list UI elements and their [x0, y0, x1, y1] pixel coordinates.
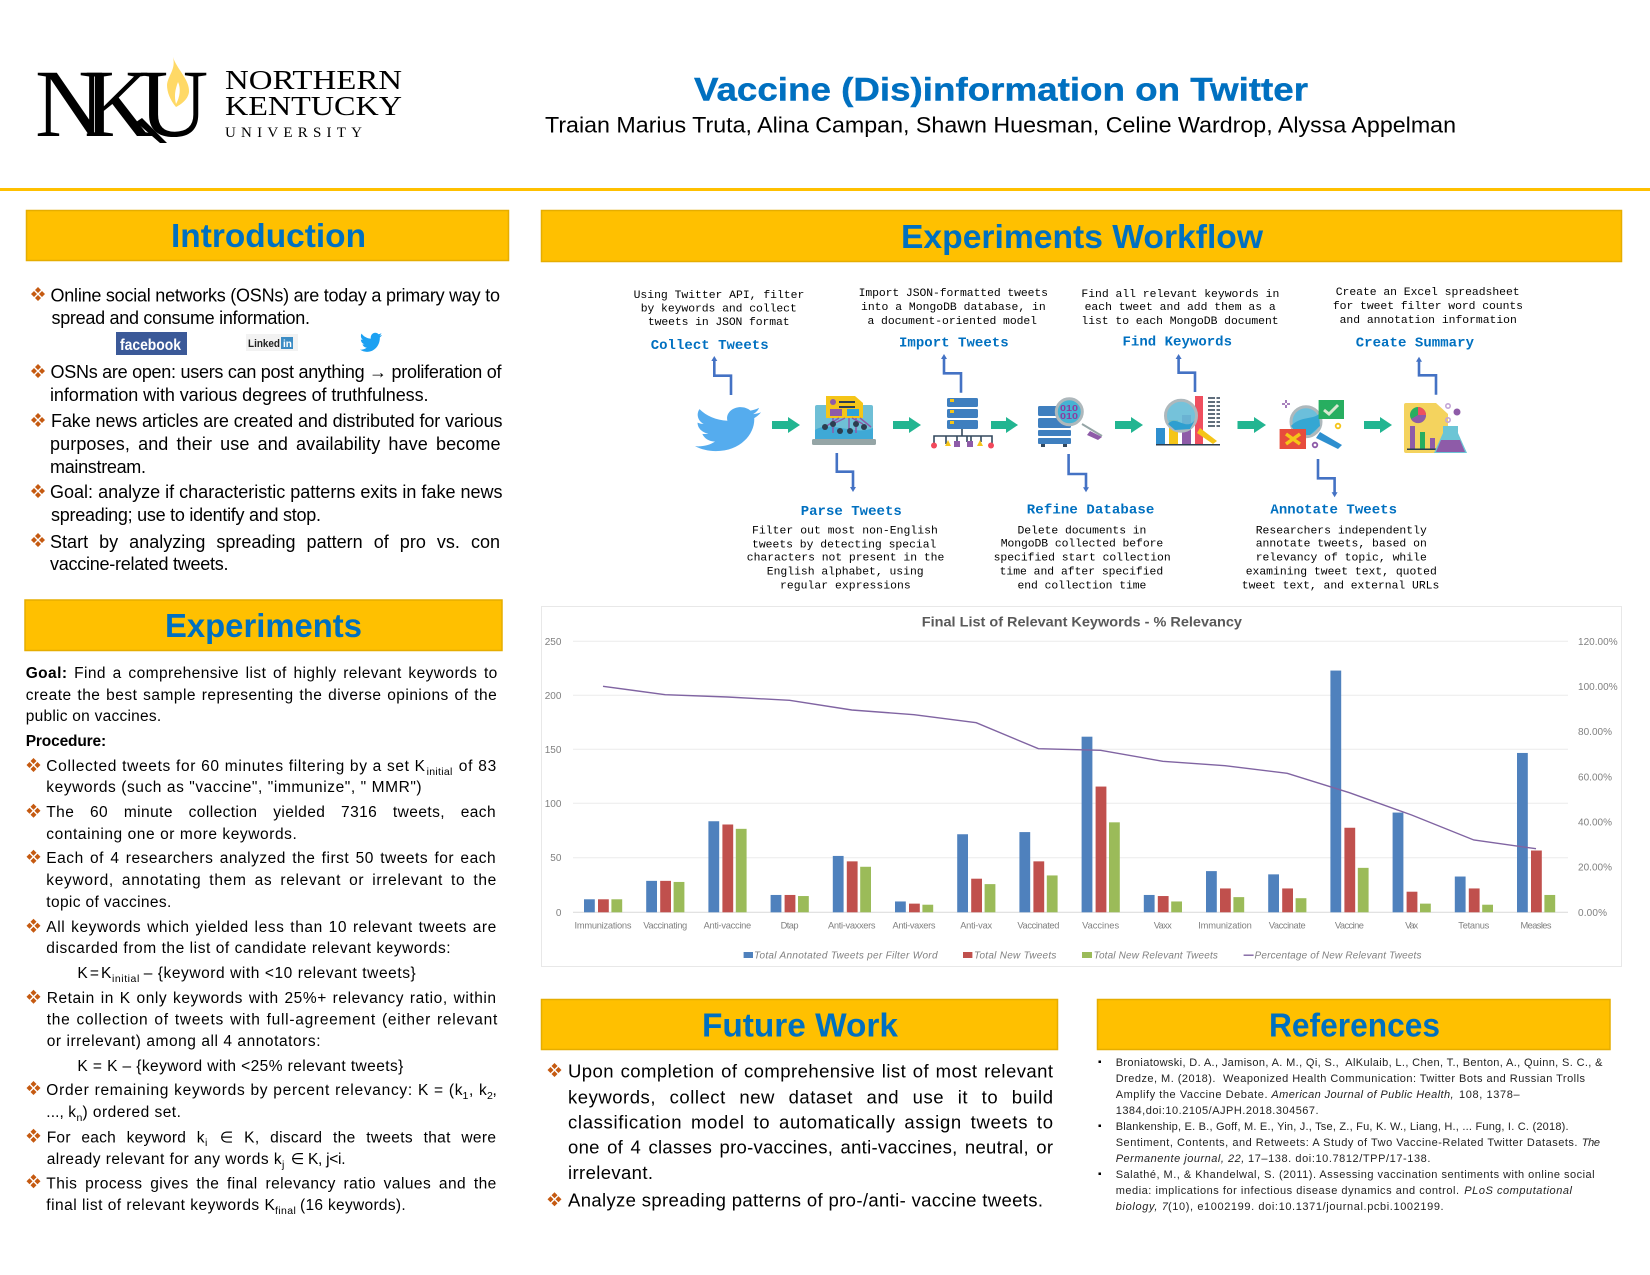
step: annotate tweets: annotate tweets, based on	[1256, 538, 1427, 550]
procedure bullets: already relevant for any words k	[47, 1151, 282, 1168]
step: refine database: time and after specified	[1000, 566, 1163, 578]
step: parse tweets: English alphabet, using	[767, 566, 924, 578]
step: create summary: Create an Excel spreadsheet	[1336, 287, 1520, 299]
procedure bullets: For each keyword k	[47, 1129, 205, 1146]
panel: experiments	[25, 600, 502, 1217]
header rule	[0, 188, 1650, 191]
step: find keywords: each tweet and add them as a	[1085, 302, 1276, 314]
left axis labels: 200	[545, 691, 562, 702]
introduction bullets: Goal: analyze if characteristic patterns exits in fake news	[50, 482, 502, 502]
reference list: 17–138. doi:10.7812/TPP/17-138.	[1248, 1153, 1430, 1165]
reference list: biology, 7	[1116, 1201, 1169, 1213]
arrow: import to refine	[991, 417, 1018, 433]
reference list: American Journal of Public Health,	[1270, 1089, 1454, 1101]
reference list: Sentiment, Contents, and Retweets: A Study of Two Vaccine-Related Twitter Datasets.	[1116, 1137, 1577, 1149]
step: parse tweets: characters not present in the	[747, 552, 944, 564]
step: refine database: MongoDB collected before	[1001, 538, 1163, 550]
reference list: 1384,doi:10.2105/AJPH.2018.304567.	[1116, 1105, 1319, 1117]
step: import tweets: a document-oriented model	[868, 316, 1037, 328]
procedure bullets: keywords (such as "vaccine", "immunize", " MMR")	[46, 779, 422, 796]
bars: total new tweets	[598, 787, 1542, 912]
icon: laptop parser	[812, 396, 876, 445]
arrow: find to annotate	[1238, 417, 1266, 433]
step: annotate tweets: relevancy of topic, while	[1256, 552, 1427, 564]
goal text: public on vaccines.	[26, 708, 161, 725]
step: import tweets: into a MongoDB database, in	[861, 302, 1046, 314]
introduction bullets: Fake news articles are created and distributed for various	[51, 411, 502, 431]
step: parse tweets: Filter out most non-English	[752, 525, 938, 537]
procedure bullets: topic of vaccines.	[46, 894, 171, 911]
introduction bullets: spreading; use to identify and stop.	[51, 505, 321, 525]
procedure bullets: This process gives the final relevancy ratio values and the	[46, 1175, 496, 1192]
procedure bullets: containing one or more keywords.	[46, 826, 297, 843]
heading: experiments workflow: Experiments Workflow	[901, 218, 1263, 255]
goal text: create the best sample representing the diverse opinions of the	[26, 687, 497, 704]
step: collect tweets: Collect Tweets	[651, 338, 769, 354]
future work bullets	[548, 1061, 1053, 1211]
category labels: Vaccines	[1082, 920, 1119, 930]
reference list: PLoS computational	[1464, 1185, 1573, 1197]
procedure bullets: j	[281, 1159, 284, 1171]
future work bullets: Analyze spreading patterns of pro-/anti- vaccine tweets.	[568, 1190, 1043, 1211]
procedure bullets: 1	[462, 1090, 468, 1102]
reference list	[1098, 1057, 1603, 1213]
step: parse tweets	[747, 453, 944, 592]
procedure bullets: (16 keywords).	[300, 1197, 406, 1214]
category labels: Vax	[1405, 920, 1418, 930]
goal text: Goal: Find a comprehensive list of highly relevant keywords to	[26, 665, 497, 682]
step: import tweets: Import JSON-formatted tweets	[859, 288, 1048, 300]
right axis labels: 20.00%	[1578, 862, 1612, 874]
icon: linkedin logo: in	[283, 339, 292, 350]
procedure bullets: K = K	[77, 965, 112, 982]
procedure bullets: ..., k	[46, 1104, 76, 1121]
chart legend: Total New Tweets	[974, 950, 1056, 962]
icon: linkedin logo	[246, 334, 298, 351]
left axis labels: 150	[545, 745, 562, 756]
panel: introduction	[26, 210, 508, 574]
introduction bullets: Online social networks (OSNs) are today a primary way to	[50, 286, 500, 306]
category labels: Tetanus	[1458, 920, 1490, 930]
procedure bullets: n	[76, 1112, 82, 1124]
step: import tweets: Import Tweets	[899, 335, 1009, 351]
arrow: collect to parse	[772, 417, 800, 433]
heading: introduction: Introduction	[171, 217, 366, 254]
procedure bullets: or irrelevant) among all 4 annotators:	[47, 1033, 320, 1050]
procedure bullets: Order remaining keywords by percent relevancy: K = (k	[46, 1082, 463, 1099]
icon: server tree	[931, 398, 994, 448]
icon: bar chart with magnifier	[1156, 396, 1220, 446]
chart legend: Total New Relevant Tweets	[1094, 950, 1218, 962]
procedure bullets: ∈ K, discard the tweets that were	[220, 1129, 496, 1146]
step: create summary: for tweet filter word counts	[1333, 301, 1523, 313]
category labels: Immunization	[1198, 920, 1252, 930]
arrow: refine to find	[1115, 417, 1143, 433]
right axis labels: 80.00%	[1578, 727, 1612, 738]
heading: future work	[542, 1000, 1058, 1050]
step: create summary: and annotation information	[1340, 315, 1517, 327]
left axis labels: 250	[545, 637, 562, 648]
category labels: Vaccine	[1335, 920, 1364, 930]
procedure bullets: the collection of tweets with full-agreement (either relevant	[47, 1011, 498, 1028]
procedure bullets: 2	[487, 1090, 493, 1102]
right axis labels: 0.00%	[1578, 908, 1607, 919]
introduction bullets: mainstream.	[50, 457, 146, 477]
introduction bullets	[31, 286, 502, 574]
introduction bullets: OSNs are open: users can post anything → proliferation of	[50, 362, 502, 382]
heading: experiments	[25, 600, 502, 650]
step: refine database: specified start collection	[994, 552, 1171, 564]
category labels: Anti-vaxers	[892, 920, 936, 930]
procedure bullets	[26, 758, 498, 1217]
reference list: The	[1582, 1137, 1600, 1149]
future work bullets: keywords, collect new dataset and use it to build	[568, 1087, 1053, 1108]
reference list: 108, 1378–	[1459, 1089, 1520, 1101]
step: collect tweets: tweets in JSON format	[648, 317, 790, 329]
bars: total annotated tweets	[584, 671, 1528, 912]
bars: total new relevant tweets	[611, 822, 1555, 912]
reference list: Blankenship, E. B., Goff, M. E., Yin, J., Tse, Z., Fu, K. W., Liang, H., ... Fung, I. C. (2018).	[1116, 1121, 1569, 1133]
procedure bullets: initial	[112, 973, 139, 985]
category labels: Immunizations	[574, 920, 632, 930]
procedure bullets: ,	[492, 1082, 497, 1099]
category labels: Dtap	[781, 920, 799, 930]
procedure bullets: of 83	[459, 758, 496, 775]
right axis labels: 100.00%	[1578, 682, 1618, 693]
procedure bullets: Each of 4 researchers analyzed the first 50 tweets for each	[46, 850, 496, 867]
chart legend: Percentage of New Relevant Tweets	[1254, 950, 1422, 962]
step: find keywords: Find Keywords	[1122, 334, 1232, 350]
step: parse tweets: regular expressions	[780, 580, 911, 592]
procedure bullets: discarded from the list of candidate relevant keywords:	[46, 940, 451, 957]
procedure label: Procedure:	[26, 733, 106, 750]
procedure bullets: K = K – {keyword with <25% relevant tweets}	[77, 1058, 403, 1075]
introduction bullets: information with various degrees of truthfulness.	[50, 385, 428, 405]
logo: Northern Kentucky University	[35, 50, 402, 157]
right axis labels: 40.00%	[1578, 818, 1612, 828]
step: create summary	[1333, 287, 1523, 395]
step: refine database: end collection time	[1018, 580, 1147, 592]
procedure bullets: The 60 minute collection yielded 7316 tweets, each	[46, 804, 496, 821]
reference list: media: implications for infectious disease dynamics and control.	[1116, 1185, 1459, 1197]
step: annotate tweets: tweet text, and external URLs	[1242, 580, 1439, 592]
step: annotate tweets	[1242, 459, 1439, 592]
icon: facebook logo: facebook	[120, 337, 181, 354]
introduction bullets: Start by analyzing spreading pattern of pro vs. con	[50, 532, 500, 552]
future work bullets: Upon completion of comprehensive list of most relevant	[568, 1061, 1053, 1082]
heading: future work: Future Work	[702, 1007, 899, 1044]
procedure bullets: i	[205, 1137, 207, 1149]
chart legend: Total Annotated Tweets per Filter Word	[754, 950, 938, 962]
left axis labels: 100	[545, 799, 562, 810]
icon: database with magnifier: 010	[1060, 404, 1079, 413]
procedure bullets: initial	[427, 766, 452, 778]
icon: report with flask	[1404, 403, 1467, 453]
reference list: Salathé, M., & Khandelwal, S. (2011). Assessing vaccination sentiments with online social	[1116, 1169, 1595, 1181]
step: refine database: Delete documents in	[1018, 525, 1146, 537]
chart legend	[744, 950, 1422, 962]
logo: Northern Kentucky University: UNIVERSITY	[225, 125, 362, 141]
icon: database with magnifier: 010	[1060, 412, 1079, 421]
goal text	[26, 665, 497, 725]
procedure bullets: Retain in K only keywords with 25%+ relevancy ratio, within	[47, 990, 496, 1007]
category labels: Anti-vaxxers	[828, 920, 876, 930]
procedure bullets: ) ordered set.	[82, 1104, 181, 1121]
panel: experiments workflow	[542, 210, 1622, 592]
step: create summary: Create Summary	[1356, 335, 1475, 351]
procedure bullets: Collected tweets for 60 minutes filtering by a set K	[46, 758, 426, 775]
step: find keywords: list to each MongoDB document	[1081, 316, 1279, 328]
procedure bullets: keyword, annotating them as relevant or irrelevant to the	[46, 872, 496, 889]
logo: Northern Kentucky University: NORTHERN	[225, 65, 402, 95]
future work bullets: one of 4 classes pro-vaccines, anti-vaccines, neutral, or	[568, 1137, 1053, 1158]
introduction bullets: purposes, and their use and availability have become	[50, 434, 500, 454]
procedure bullets: , k	[469, 1082, 487, 1099]
step: import tweets	[859, 288, 1048, 393]
step: find keywords: Find all relevant keywords in	[1081, 289, 1279, 301]
heading: experiments: Experiments	[165, 607, 362, 644]
procedure bullets: – {keyword with <10 relevant tweets}	[144, 965, 416, 982]
category labels: Measles	[1520, 920, 1552, 930]
right axis labels	[1578, 637, 1618, 919]
step: collect tweets: by keywords and collect	[641, 303, 797, 315]
heading: experiments workflow	[542, 210, 1622, 262]
step: parse tweets: tweets by detecting special	[752, 539, 937, 551]
reference list: Broniatowski, D. A., Jamison, A. M., Qi, S., AlKulaib, L., Chen, T., Benton, A., Quinn, S. C., &	[1116, 1057, 1603, 1069]
step: annotate tweets: examining tweet text, quoted	[1246, 566, 1437, 578]
right axis labels: 120.00%	[1578, 637, 1618, 648]
procedure bullets: final	[275, 1205, 296, 1217]
step: parse tweets: Parse Tweets	[801, 504, 902, 520]
arrow: parse to import	[893, 417, 921, 433]
future work bullets: classification model to automatically assign tweets to	[568, 1112, 1053, 1133]
future work bullets: irrelevant.	[568, 1162, 653, 1183]
procedure bullets: final list of relevant keywords K	[46, 1197, 275, 1214]
icon: annotate magnifier	[1280, 400, 1344, 449]
icon: facebook logo	[116, 332, 187, 355]
title: Vaccine (Dis)information on Twitter	[694, 72, 1308, 108]
reference list: Amplify the Vaccine Debate.	[1116, 1089, 1268, 1101]
right axis labels: 60.00%	[1578, 772, 1612, 784]
step: collect tweets: Using Twitter API, filter	[634, 290, 804, 302]
arrow: annotate to summary	[1364, 417, 1392, 433]
category labels: Vaxx	[1154, 920, 1172, 930]
category labels: Anti-vaccine	[704, 920, 751, 930]
icon: twitter bird small	[360, 333, 382, 352]
left axis labels: 50	[550, 853, 562, 864]
procedure bullets: ∈ K, j<i.	[291, 1151, 346, 1168]
introduction bullets: spread and consume information.	[52, 308, 310, 328]
reference list: (10), e1002199. doi:10.1371/journal.pcbi.1002199.	[1168, 1201, 1444, 1213]
step: refine database	[994, 454, 1171, 592]
authors: Traian Marius Truta, Alina Campan, Shawn Huesman, Celine Wardrop, Alyssa Appelman	[545, 112, 1456, 138]
reference list: Permanente journal, 22,	[1116, 1153, 1244, 1165]
heading: references	[1098, 1000, 1610, 1050]
heading: introduction	[26, 210, 508, 260]
category labels: Vaccinated	[1017, 920, 1059, 930]
panel: references	[1098, 1000, 1610, 1213]
left axis labels	[545, 637, 562, 919]
step: annotate tweets: Researchers independently	[1256, 525, 1427, 537]
line: percentage of new relevant tweets	[603, 686, 1536, 849]
category labels: Vaccinate	[1269, 920, 1306, 930]
panel: future work	[542, 1000, 1058, 1211]
category labels: Vaccinating	[643, 920, 687, 930]
procedure bullets: All keywords which yielded less than 10 relevant tweets are	[46, 919, 496, 936]
left axis labels: 0	[556, 908, 562, 919]
step: annotate tweets: Annotate Tweets	[1270, 502, 1397, 518]
category labels: Anti-vax	[960, 920, 993, 930]
icon: database with magnifier	[1038, 399, 1102, 447]
category labels	[574, 920, 1552, 930]
step: refine database: Refine Database	[1027, 502, 1154, 518]
chart: final list of relevant keywords	[542, 606, 1622, 966]
icon: linkedin logo: Linked	[248, 338, 280, 350]
reference list: Dredze, M. (2018). Weaponized Health Communication: Twitter Bots and Russian Trolls	[1116, 1073, 1586, 1085]
step: find keywords	[1081, 289, 1279, 392]
icon: twitter bird	[695, 407, 761, 451]
logo: Northern Kentucky University: NKU	[35, 50, 208, 157]
step: collect tweets	[634, 290, 804, 395]
logo: Northern Kentucky University: KENTUCKY	[225, 91, 402, 121]
introduction bullets: vaccine-related tweets.	[50, 554, 228, 574]
heading: references: References	[1269, 1007, 1440, 1044]
chart title: Final List of Relevant Keywords - % Relevancy	[922, 614, 1242, 630]
